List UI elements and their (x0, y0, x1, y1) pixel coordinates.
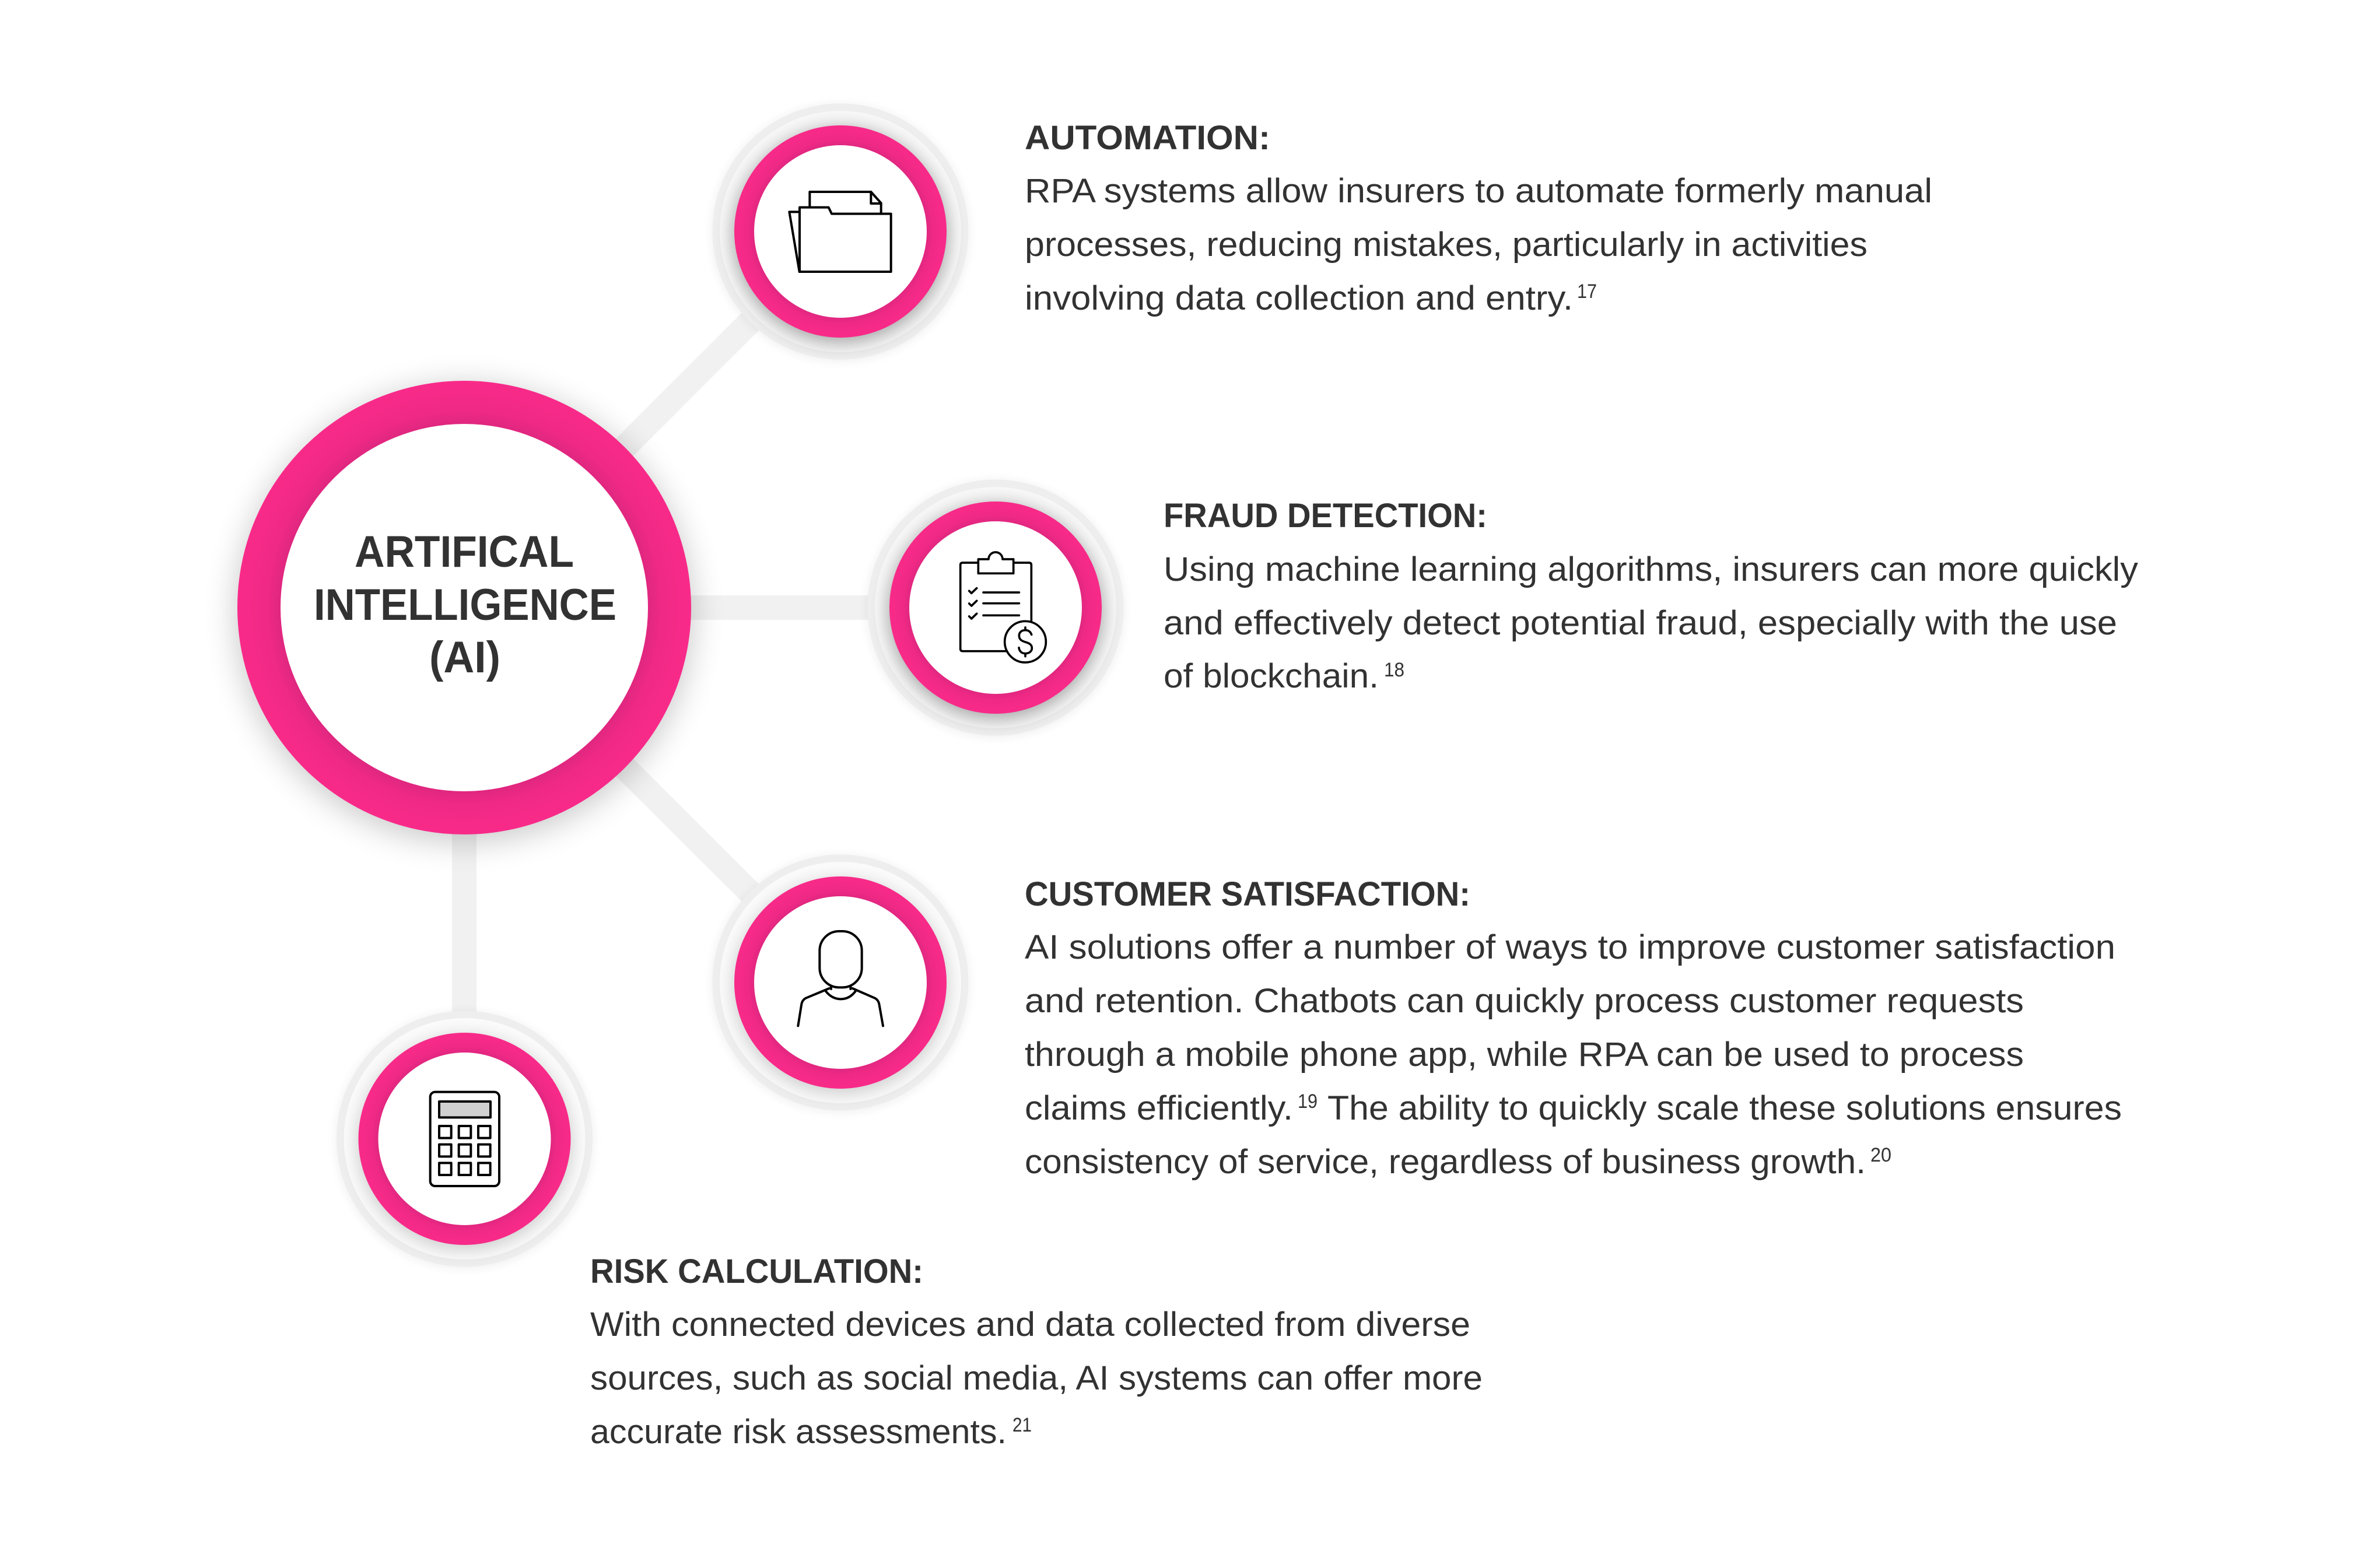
text block: risk calculation: sources, such as social media, AI systems can offer more (590, 1359, 1483, 1397)
text block: automation: 17 (1577, 280, 1597, 303)
icon: person (798, 931, 883, 1026)
text block: fraud detection: 18 (1384, 659, 1404, 681)
text block: risk calculation: RISK CALCULATION: (590, 1253, 923, 1290)
text block: customer satisfaction: and retention. Chatbots can quickly process customer requests (1025, 982, 2024, 1020)
text block: automation (1025, 119, 1932, 317)
text block: risk calculation (590, 1253, 1483, 1451)
text block: customer satisfaction: AI solutions offer a number of ways to improve customer satisfaction (1025, 928, 2115, 966)
text block: risk calculation: accurate risk assessments. (590, 1413, 1007, 1451)
icon: calculator (430, 1092, 499, 1186)
text block: automation: RPA systems allow insurers to automate formerly manual (1025, 172, 1932, 210)
connector lines (464, 231, 996, 1139)
text block: customer satisfaction: 20 (1870, 1144, 1891, 1166)
node: risk calculation (335, 1011, 594, 1269)
text block: fraud detection: of blockchain. (1164, 657, 1379, 695)
text block: customer satisfaction: claims efficiently. (1025, 1089, 1293, 1127)
central label: (AI) (429, 633, 500, 682)
text block: customer satisfaction: consistency of service, regardless of business growth. (1025, 1143, 1866, 1181)
node: fraud detection (866, 479, 1125, 738)
central label (314, 527, 616, 682)
text block: automation: AUTOMATION: (1025, 119, 1270, 157)
text block: automation: involving data collection and entry. (1025, 279, 1573, 317)
text block: risk calculation: 21 (1012, 1414, 1032, 1436)
icon: folder (789, 192, 891, 272)
text block: fraud detection: and effectively detect potential fraud, especially with the use (1164, 604, 2117, 642)
text block: customer satisfaction: CUSTOMER SATISFACTION: (1025, 875, 1470, 913)
text block: fraud detection (1164, 497, 2138, 695)
text block: automation: processes, reducing mistakes, particularly in activities (1025, 226, 1868, 264)
node: customer satisfaction (711, 854, 970, 1113)
node: automation (711, 103, 970, 362)
central node: artificial intelligence (237, 381, 692, 841)
text block: fraud detection: FRAUD DETECTION: (1164, 497, 1487, 535)
text block: customer satisfaction (1025, 875, 2122, 1181)
central label: ARTIFICAL (355, 527, 574, 577)
text block: risk calculation: With connected devices and data collected from diverse (590, 1306, 1470, 1344)
icon: clipboard with dollar coin (961, 552, 1046, 662)
central label: INTELLIGENCE (314, 580, 616, 630)
text block: customer satisfaction: 19 (1298, 1090, 1318, 1113)
text block: customer satisfaction: through a mobile phone app, while RPA can be used to process (1025, 1036, 2024, 1074)
text block: fraud detection: Using machine learning algorithms, insurers can more quickly (1164, 550, 2138, 588)
text block: customer satisfaction: The ability to quickly scale these solutions ensures (1327, 1089, 2122, 1127)
